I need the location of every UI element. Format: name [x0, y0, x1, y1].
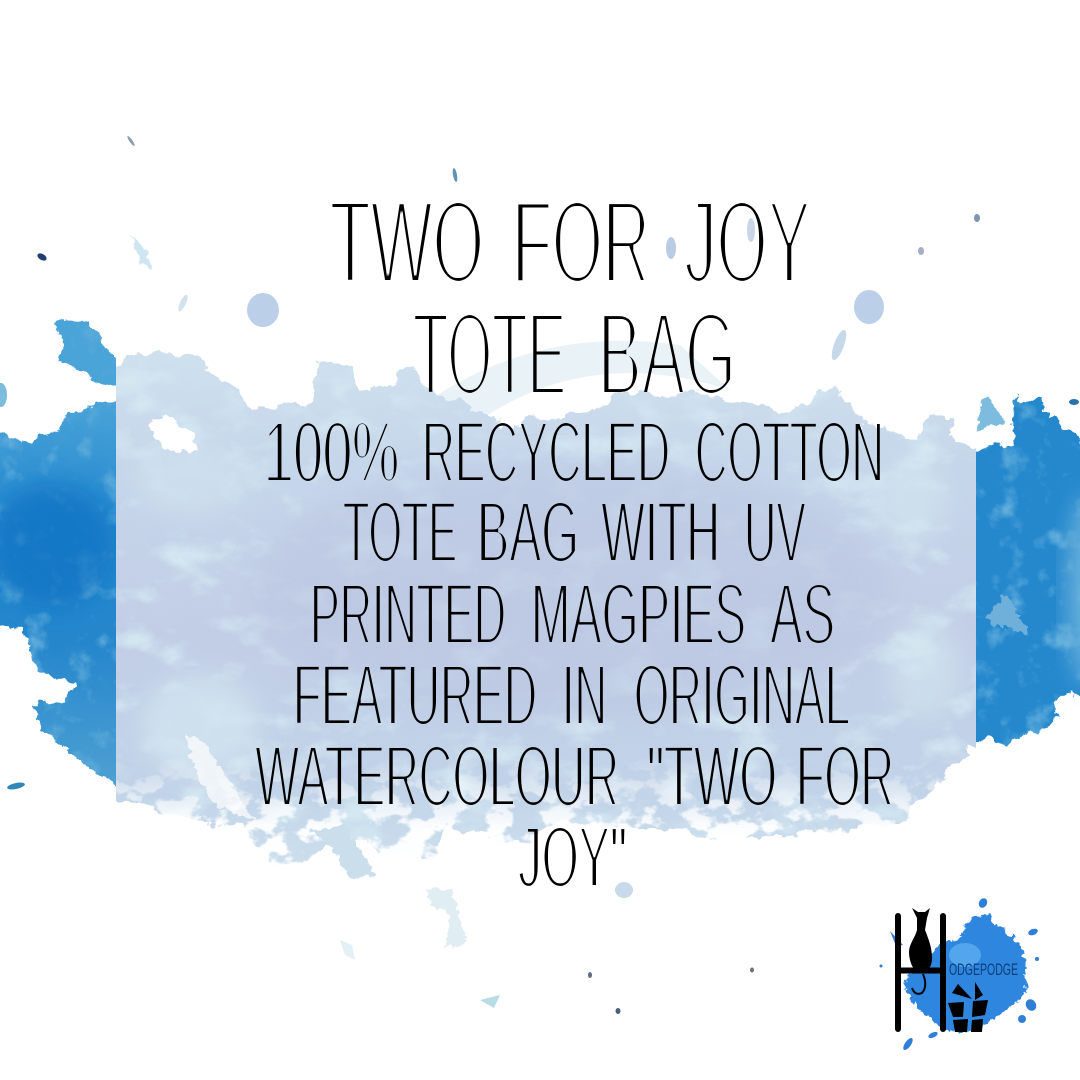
light patch upper left [164, 469, 220, 500]
lavender core of wash [250, 460, 890, 720]
white gap in wash [150, 415, 197, 453]
product description: BAG [477, 484, 579, 581]
white breaks near bottom of wash [186, 735, 255, 822]
logo cat [909, 908, 932, 969]
product description: COTTON [695, 404, 884, 501]
title: TOTE [413, 288, 566, 421]
white flecks in lower wash [116, 766, 944, 868]
product description: PRINTED [310, 566, 506, 663]
product description: 100% [264, 404, 399, 501]
product description: ORIGINAL [634, 647, 850, 744]
product description: WITH [601, 484, 720, 581]
pale central watercolour wash [116, 350, 976, 865]
logo splat highlight [949, 943, 981, 967]
left blue paint splash [0, 320, 125, 792]
light patch right lower [894, 632, 956, 713]
title: BAG [598, 288, 736, 421]
product description: FEATURED [293, 647, 537, 744]
faint swirl above wash [430, 341, 730, 420]
product description: AS [770, 566, 835, 663]
product description: "TWO [647, 728, 777, 825]
logo wordmark: ODGEPODGE [949, 960, 1018, 979]
logo letter H [898, 916, 943, 1029]
product description: TOTE [343, 484, 457, 581]
product description: FOR [796, 728, 894, 825]
logo cat tail [912, 974, 925, 994]
title: TWO [330, 176, 484, 309]
light patch right upper [886, 484, 935, 522]
logo droplets [880, 897, 1039, 1051]
logo blue splat [905, 912, 1027, 1032]
light patch lower left [142, 676, 256, 768]
right splash pale triangle [983, 593, 1030, 637]
product description: MAGPIES [531, 566, 746, 663]
title: JOY [684, 176, 811, 309]
logo gift [948, 982, 988, 1032]
title: FOR [512, 176, 650, 309]
title [330, 176, 811, 421]
product description: UV [744, 484, 806, 581]
product description: IN [562, 647, 607, 744]
product description: RECYCLED [422, 404, 670, 501]
small blue patch, right [977, 397, 1007, 432]
right blue paint splash [965, 397, 1080, 743]
left splash dark core [0, 483, 114, 607]
product description: WATERCOLOUR [255, 728, 619, 825]
product description: JOY" [518, 809, 627, 906]
right splash lighter side [1068, 495, 1080, 685]
logo: Hodgepodge [880, 897, 1039, 1051]
product description [255, 404, 894, 906]
